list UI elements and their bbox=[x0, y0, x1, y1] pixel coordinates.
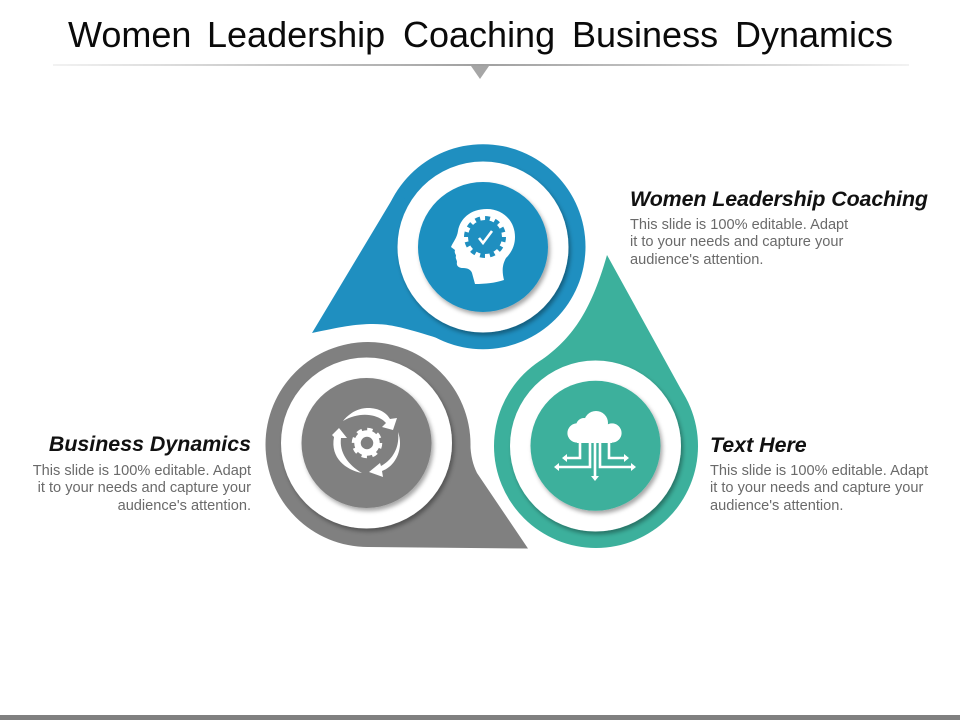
text block: Text Here: Text Here bbox=[710, 433, 807, 457]
text block: Text Here: This slide is 100% editable. Adapt bbox=[710, 463, 928, 479]
panel: green teardrop bbox=[494, 255, 698, 548]
text block: Business Dynamics: This slide is 100% editable. Adapt bbox=[33, 463, 251, 479]
text block: Business Dynamics: it to your needs and capture your bbox=[38, 480, 251, 496]
grey teardrop shape bbox=[266, 342, 528, 548]
title: Women bbox=[68, 14, 191, 55]
title: Dynamics bbox=[735, 14, 893, 55]
title: Coaching bbox=[403, 14, 555, 55]
text block: Text Here: it to your needs and capture your bbox=[710, 480, 924, 496]
grey white ring bbox=[281, 358, 452, 528]
grey inner disc bbox=[302, 378, 432, 508]
footer bar bbox=[0, 715, 960, 720]
blue teardrop shape bbox=[312, 144, 586, 349]
green white ring bbox=[510, 360, 681, 532]
title: Business bbox=[572, 14, 718, 55]
text block: Women Leadership Coaching: it to your needs and capture your bbox=[630, 234, 844, 250]
panel: grey teardrop bbox=[266, 342, 528, 548]
text block: Business Dynamics bbox=[33, 432, 251, 514]
text block: Text Here: audience's attention. bbox=[710, 498, 843, 514]
green inner disc bbox=[530, 381, 660, 511]
text block: Women Leadership Coaching: Women Leadership Coaching bbox=[630, 187, 928, 211]
text block: Women Leadership Coaching bbox=[630, 187, 928, 268]
blue inner disc bbox=[418, 182, 548, 312]
text block: Women Leadership Coaching: audience's attention. bbox=[630, 252, 763, 268]
text block: Text Here bbox=[710, 433, 928, 514]
text block: Business Dynamics: audience's attention. bbox=[118, 498, 251, 514]
icon: gear with cycle arrows bbox=[332, 408, 400, 477]
text block: Women Leadership Coaching: This slide is 100% editable. Adapt bbox=[630, 217, 848, 233]
icon: cloud network bbox=[554, 411, 636, 481]
green teardrop shape bbox=[494, 255, 698, 548]
title divider with pointer bbox=[53, 64, 909, 79]
blue white ring bbox=[398, 162, 568, 332]
icon: head with gear bbox=[451, 209, 515, 284]
panel: blue teardrop bbox=[312, 144, 586, 349]
title: Leadership bbox=[207, 14, 385, 55]
text block: Business Dynamics: Business Dynamics bbox=[49, 432, 251, 456]
